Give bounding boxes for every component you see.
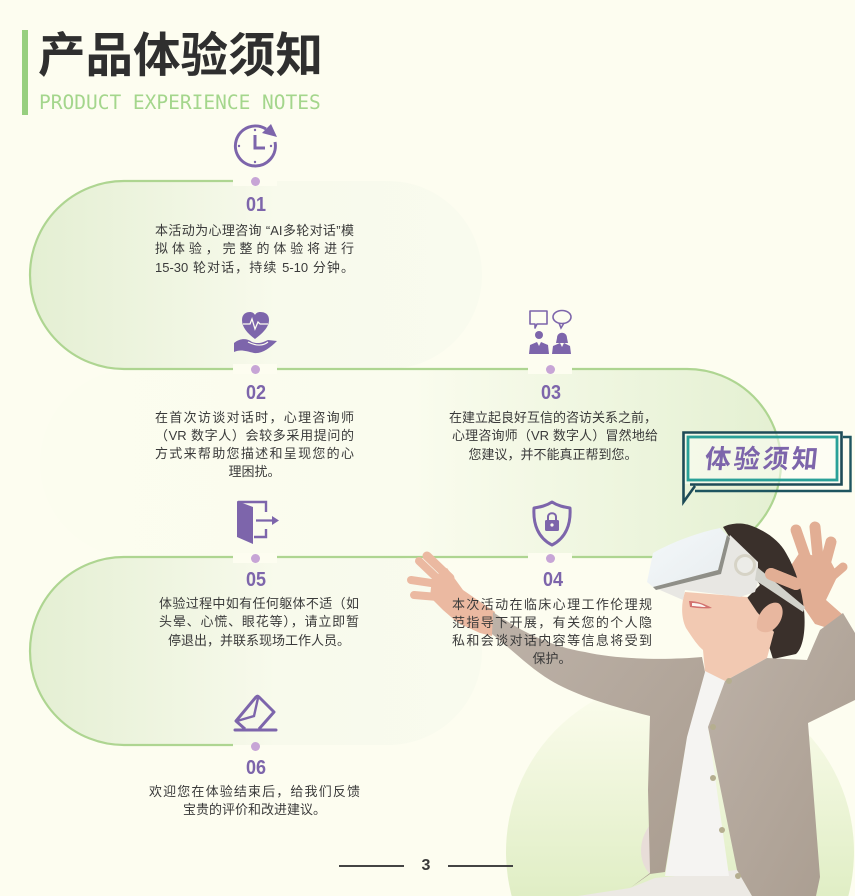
description — [452, 596, 652, 666]
headset — [653, 535, 758, 600]
ear — [757, 603, 783, 632]
description: 本活动为心理咨询 “AI多轮对话”模 — [155, 223, 354, 238]
description: 头晕、心慌、眼花等），请立即暂 — [159, 614, 359, 629]
description: 方式来帮助您描述和呈现您的心 — [155, 446, 354, 461]
hair — [723, 524, 805, 659]
description — [159, 596, 359, 648]
description: 范指导下开展，有关您的个人隐 — [452, 615, 652, 630]
pants — [578, 870, 752, 896]
step 05 — [159, 500, 359, 648]
dot — [250, 365, 260, 374]
thumb — [771, 574, 796, 584]
description: 宝贵的评价和改进建议。 — [183, 802, 326, 817]
description: 私和会谈对话内容等信息将受到 — [452, 633, 652, 648]
icon: shield with lock — [532, 500, 572, 546]
description: 停退出，并联系现场工作人员。 — [168, 633, 350, 648]
step 01 — [155, 124, 354, 275]
page number: 3 — [422, 857, 430, 874]
description: 保护。 — [532, 651, 572, 666]
number: 06 — [246, 757, 266, 779]
description: 在首次访谈对话时，心理咨询师 — [155, 410, 354, 424]
step 03 — [449, 310, 658, 462]
description — [449, 410, 658, 462]
icon: two people talking — [529, 310, 572, 354]
description: 本次活动在临床心理工作伦理规 — [452, 596, 652, 612]
description: （VR 数字人）会较多采用提问的 — [155, 428, 354, 443]
dot — [546, 365, 554, 374]
icon: envelope — [234, 694, 278, 732]
callout text: 体验须知 — [703, 444, 823, 474]
description: 欢迎您在体验结束后，给我们反馈 — [149, 784, 360, 799]
description — [155, 223, 354, 275]
number: 04 — [543, 569, 563, 591]
pink cloth — [641, 825, 660, 874]
number: 02 — [246, 382, 266, 404]
description: 15-30 轮对话，持续 5-10 分钟。 — [155, 260, 354, 275]
subtitle: PRODUCT EXPERIENCE NOTES — [39, 91, 321, 114]
dot — [250, 554, 260, 563]
description: 心理咨询师（VR 数字人）冒然地给 — [452, 428, 658, 443]
hand thumb over headset — [771, 574, 796, 584]
description: 您建议，并不能真正帮到您。 — [468, 447, 638, 462]
right hand — [785, 552, 843, 632]
cardigan — [492, 612, 705, 888]
dot — [250, 177, 260, 186]
buttons — [710, 678, 741, 879]
left hand — [411, 556, 450, 597]
number: 03 — [541, 382, 561, 404]
description: 拟体验，完整的体验将进行 — [155, 241, 354, 256]
description: 体验过程中如有任何躯体不适（如 — [159, 596, 359, 611]
photo: boy wearing VR headset — [407, 522, 855, 896]
description: 理困扰。 — [228, 464, 280, 479]
dot — [546, 554, 554, 563]
title: 产品体验须知 — [38, 30, 323, 83]
number: 01 — [246, 194, 266, 216]
step 04 — [452, 500, 652, 666]
icon: heart on hand — [234, 312, 277, 354]
neck and face — [682, 592, 774, 681]
number: 05 — [246, 569, 266, 591]
description — [149, 784, 360, 817]
icon: clock with arrow — [234, 124, 277, 168]
description: 在建立起良好互信的咨访关系之前， — [449, 410, 657, 425]
dot — [250, 742, 260, 750]
icon: exit door — [237, 500, 279, 544]
step 02 — [155, 312, 354, 479]
description — [155, 410, 354, 479]
title accent bar — [22, 30, 28, 115]
callout badge — [682, 431, 852, 506]
mouth — [689, 601, 712, 608]
t-shirt — [665, 670, 729, 876]
step 06 — [149, 694, 360, 817]
